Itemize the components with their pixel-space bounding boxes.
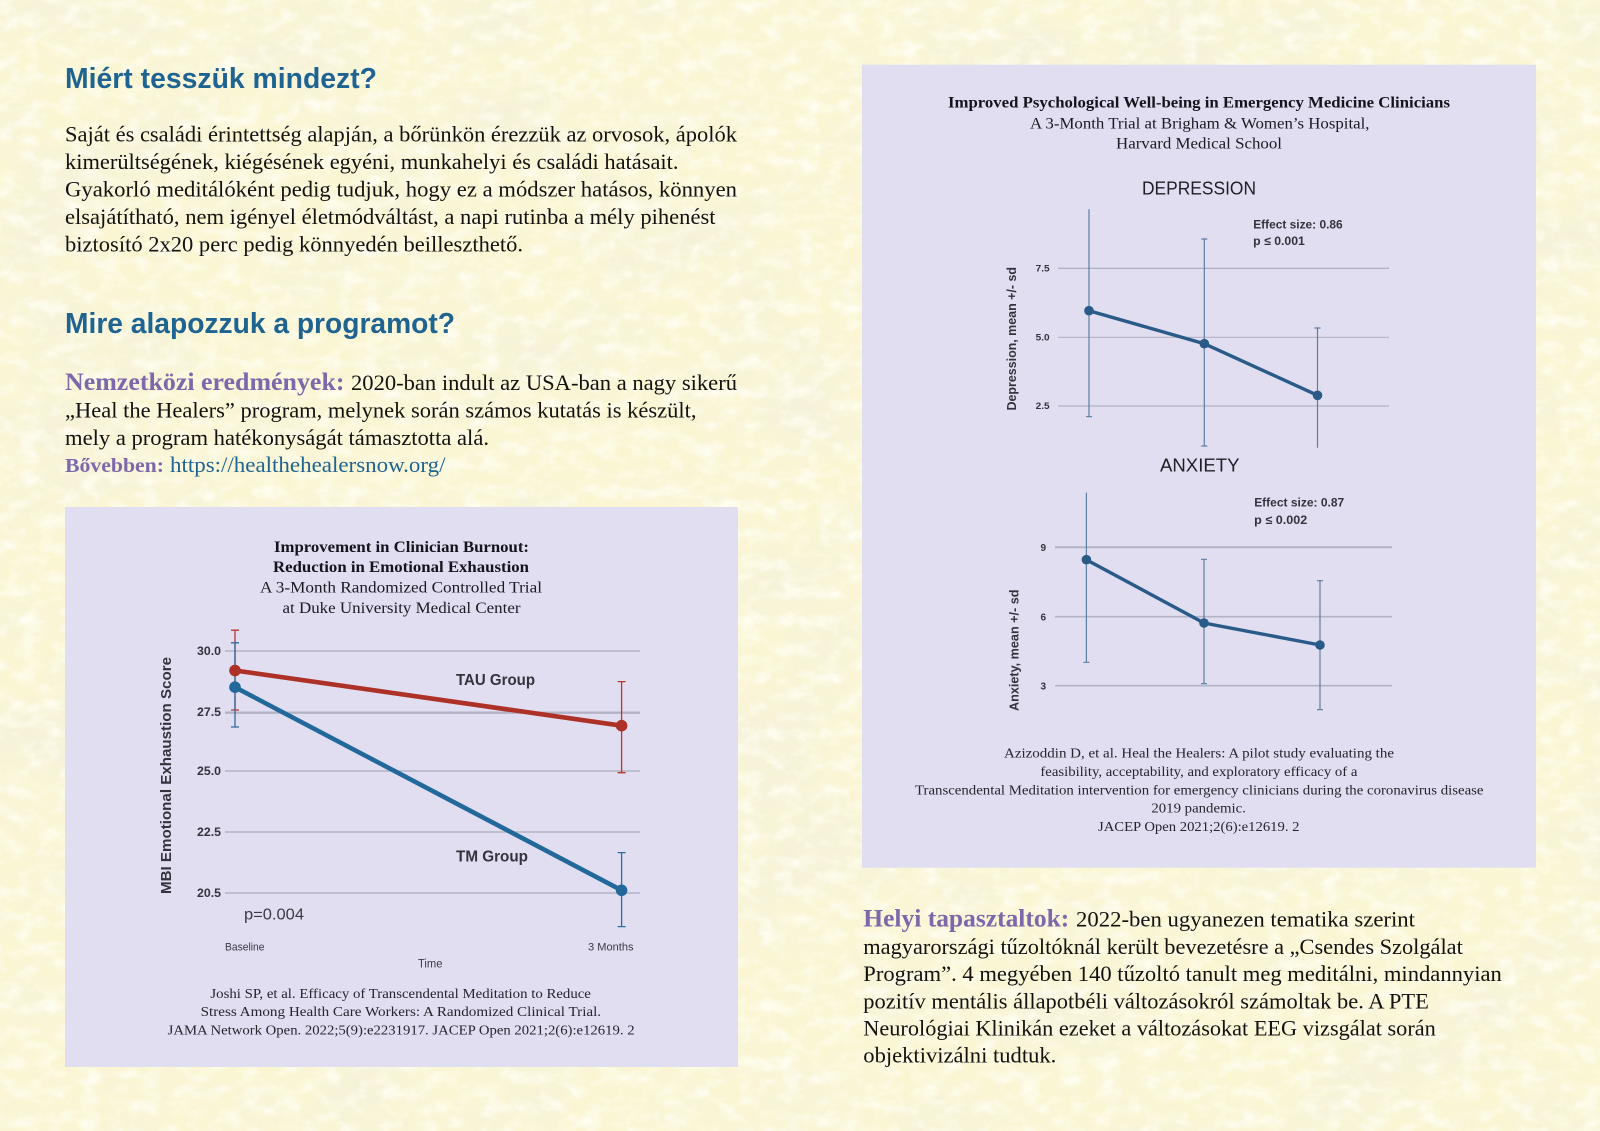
line chart: emotional exhaustion bbox=[158, 630, 640, 970]
panel: burnout chart bbox=[65, 507, 738, 1067]
chart: anxiety: 3 bbox=[1040, 681, 1046, 692]
chart: depression bbox=[1005, 178, 1389, 448]
panel title: Harvard Medical School bbox=[1116, 135, 1282, 152]
text block: local experiences: Neurológiai Klinikán ezeket a változásokat EEG vizsgálat során bbox=[863, 1015, 1436, 1040]
line chart: emotional exhaustion: Time bbox=[418, 958, 442, 970]
citation: Stress Among Health Care Workers: A Randomized Clinical Trial. bbox=[201, 1005, 601, 1020]
error bars bbox=[231, 630, 626, 927]
text block: international results bbox=[65, 369, 737, 477]
citation: Azizoddin D, et al. Heal the Healers: A pilot study evaluating the bbox=[1004, 747, 1394, 762]
text block: local experiences: 2022-ben ugyanezen tematika szerint bbox=[1076, 907, 1415, 932]
line chart: emotional exhaustion: 27.5 bbox=[197, 707, 222, 719]
text block: international results: 2020-ban indult az USA-ban a nagy sikerű bbox=[351, 370, 737, 395]
series: TAU group bbox=[229, 665, 627, 732]
text block: international results: https://healthehealersnow.org/ bbox=[170, 452, 446, 477]
error bars bbox=[1086, 209, 1320, 448]
line chart: emotional exhaustion: 20.5 bbox=[197, 888, 222, 900]
chart: depression: Effect size: 0.86 bbox=[1253, 218, 1343, 232]
chart title: Improvement in Clinician Burnout: bbox=[274, 539, 529, 556]
text block: local experiences: objektivizálni tudtuk. bbox=[863, 1043, 1056, 1068]
text block: international results: „Heal the Healers” program, melynek során számos kutatás is készült, bbox=[65, 398, 696, 422]
citation: Joshi SP, et al. Efficacy of Transcendental Meditation to Reduce bbox=[210, 987, 591, 1002]
text block: local experiences bbox=[863, 906, 1502, 1068]
text block: international results: Bővebben: bbox=[65, 455, 164, 477]
chart title: Reduction in Emotional Exhaustion bbox=[273, 559, 529, 576]
chart: anxiety: 6 bbox=[1040, 612, 1046, 623]
text block: motivation paragraph: elsajátítható, nem igényel életmódváltást, a napi rutinba a mély pihenést bbox=[65, 204, 716, 229]
citation: 2019 pandemic. bbox=[1151, 802, 1246, 817]
citation: JACEP Open 2021;2(6):e12619. 2 bbox=[1098, 820, 1300, 835]
text block: motivation paragraph: Gyakorló meditálóként pedig tudjuk, hogy ez a módszer hatásos, könnyen bbox=[65, 177, 737, 202]
anxiety trend line bbox=[1082, 555, 1325, 650]
text block: international results: Nemzetközi eredmények: bbox=[65, 369, 344, 396]
line chart: emotional exhaustion: Baseline bbox=[225, 942, 264, 954]
text block: motivation paragraph: Saját és családi érintettség alapján, a bőrünkön érezzük az orvosok, ápolók bbox=[65, 122, 737, 147]
text block: international results: mely a program hatékonyságát támasztotta alá. bbox=[65, 425, 489, 450]
chart: depression: 7.5 bbox=[1036, 264, 1050, 275]
line chart: emotional exhaustion: MBI Emotional Exhaustion Score bbox=[158, 657, 175, 894]
citation bbox=[915, 747, 1484, 835]
chart title bbox=[260, 539, 542, 617]
line chart: emotional exhaustion: 30.0 bbox=[197, 646, 221, 658]
text block: motivation paragraph: biztosító 2x20 perc pedig könnyedén beilleszthető. bbox=[65, 231, 523, 256]
citation bbox=[168, 987, 635, 1039]
text block: motivation paragraph: kimerültségének, kiégésének egyéni, munkahelyi és családi hatásait. bbox=[65, 149, 678, 174]
chart: depression: p ≤ 0.001 bbox=[1253, 234, 1305, 248]
chart: anxiety: 9 bbox=[1040, 543, 1046, 554]
series: TM group bbox=[229, 681, 627, 896]
chart: depression: 2.5 bbox=[1036, 401, 1050, 412]
depression trend line bbox=[1084, 306, 1322, 400]
line chart: emotional exhaustion: 3 Months bbox=[588, 942, 634, 954]
line chart: emotional exhaustion: 25.0 bbox=[197, 766, 221, 778]
panel title bbox=[948, 95, 1450, 152]
text block: local experiences: Helyi tapasztaltok: bbox=[863, 906, 1069, 933]
chart: anxiety: Anxiety, mean +/- sd bbox=[1007, 590, 1021, 711]
chart: anxiety: p ≤ 0.002 bbox=[1254, 513, 1308, 527]
panel title: A 3-Month Trial at Brigham & Women’s Hospital, bbox=[1030, 115, 1370, 132]
chart title: A 3-Month Randomized Controlled Trial bbox=[260, 580, 542, 596]
text block: local experiences: Program”. 4 megyében 140 tűzoltó tanult meg meditálni, mindannyian bbox=[863, 961, 1502, 986]
text block: motivation paragraph bbox=[65, 122, 737, 256]
panel: psychological well-being charts bbox=[862, 65, 1536, 868]
line chart: emotional exhaustion: 22.5 bbox=[197, 827, 222, 839]
citation: JAMA Network Open. 2022;5(9):e2231917. JACEP Open 2021;2(6):e12619. 2 bbox=[168, 1024, 635, 1039]
chart: depression: DEPRESSION bbox=[1142, 178, 1256, 198]
chart: depression: 5.0 bbox=[1036, 333, 1050, 344]
line chart: emotional exhaustion: TAU Group bbox=[456, 672, 535, 689]
error bars bbox=[1083, 493, 1323, 710]
chart: depression: Depression, mean +/- sd bbox=[1005, 267, 1019, 410]
text block: local experiences: magyarországi tűzoltóknál került bevezetésre a „Csendes Szolgálat bbox=[863, 934, 1463, 959]
heading: Miért tesszük mindezt?: Miért tesszük mindezt? bbox=[65, 63, 377, 95]
heading: Mire alapozzuk a programot?: Mire alapozzuk a programot? bbox=[65, 308, 455, 340]
text block: local experiences: pozitív mentális állapotbéli változásokról számoltak be. A PTE bbox=[863, 988, 1429, 1013]
line chart: emotional exhaustion: TM Group bbox=[456, 848, 528, 866]
line chart: emotional exhaustion: p=0.004 bbox=[244, 906, 304, 924]
citation: Transcendental Meditation intervention for emergency clinicians during the coronavirus disease bbox=[915, 783, 1484, 798]
chart: anxiety bbox=[1007, 456, 1392, 711]
chart: anxiety: Effect size: 0.87 bbox=[1254, 496, 1345, 510]
citation: feasibility, acceptability, and exploratory efficacy of a bbox=[1040, 765, 1358, 780]
chart title: at Duke University Medical Center bbox=[282, 600, 521, 617]
chart: anxiety: ANXIETY bbox=[1160, 456, 1240, 476]
panel title: Improved Psychological Well-being in Emergency Medicine Clinicians bbox=[948, 95, 1450, 112]
